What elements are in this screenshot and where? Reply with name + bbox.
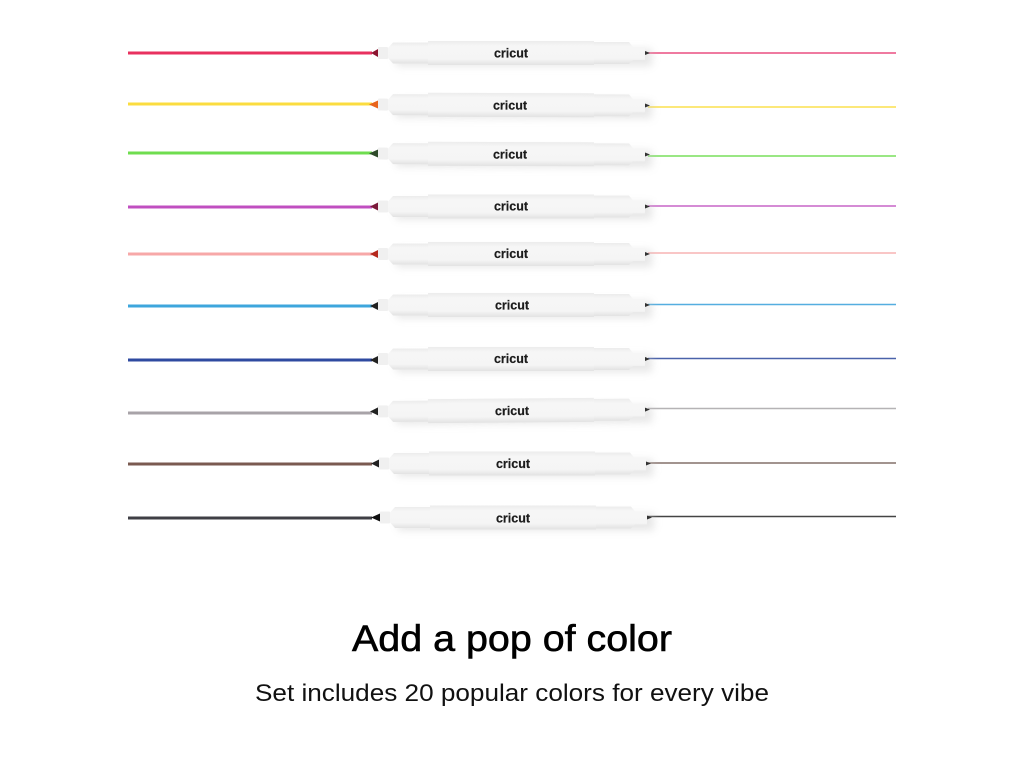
right stroke [648, 155, 896, 157]
pen row 5: peach pink [128, 242, 896, 267]
pen row 9: brown [128, 452, 896, 476]
pen [371, 41, 652, 66]
left stroke [128, 304, 372, 308]
pen [369, 93, 652, 118]
title: Add a pop of color [352, 618, 672, 659]
subtitle: Set includes 20 popular colors for every vibe [255, 680, 769, 707]
right stroke [648, 106, 896, 108]
left stroke [128, 206, 372, 208]
pen: cricut [494, 247, 529, 261]
pen row 7: navy blue [128, 347, 896, 372]
pen row 3: green [128, 142, 896, 167]
pen row 1: pink [128, 41, 896, 66]
left stroke [128, 358, 372, 362]
left stroke [128, 516, 372, 520]
right stroke [648, 252, 896, 254]
right stroke [648, 358, 896, 360]
pen [370, 398, 652, 424]
pen row 10: black [128, 506, 896, 530]
right stroke [648, 516, 896, 518]
pen row 4: purple [128, 194, 896, 220]
pen: cricut [494, 352, 529, 366]
left stroke [128, 152, 372, 154]
pen: cricut [493, 147, 528, 162]
pen: cricut [494, 200, 529, 214]
pen row 2: yellow [128, 93, 896, 118]
pen: cricut [496, 512, 531, 526]
pen: cricut [495, 298, 530, 312]
left stroke [128, 252, 372, 256]
right stroke [648, 304, 896, 306]
left stroke [128, 102, 372, 106]
pen row 8: grey [128, 398, 896, 424]
pen row 6: sky blue [128, 293, 896, 318]
right stroke [648, 52, 896, 54]
pen: cricut [495, 404, 530, 418]
pen [370, 242, 652, 267]
pen [370, 194, 652, 220]
right stroke [648, 462, 896, 464]
right stroke [648, 205, 896, 207]
right stroke [648, 408, 896, 410]
pen [371, 452, 653, 476]
pen [369, 142, 652, 167]
pen: cricut [494, 46, 529, 60]
pen: cricut [496, 457, 531, 471]
pen: cricut [493, 98, 528, 113]
pen [370, 347, 652, 372]
pen [370, 293, 652, 318]
left stroke [128, 52, 372, 54]
pen [371, 506, 654, 530]
left stroke [128, 462, 372, 466]
left stroke [128, 412, 372, 414]
